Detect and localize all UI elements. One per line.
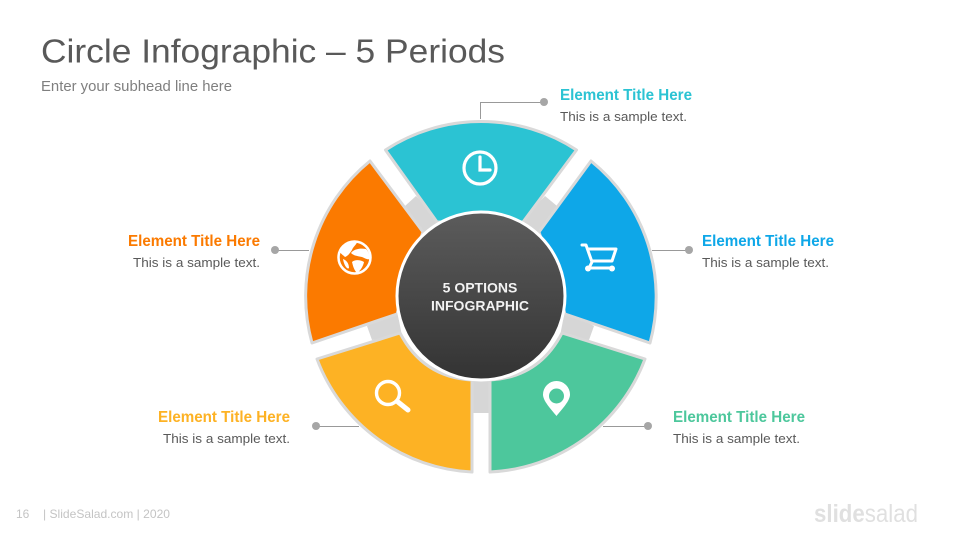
footer page number: 16 xyxy=(16,507,30,521)
callout: green: Element Title Here xyxy=(673,409,805,426)
icon: location pin xyxy=(543,381,570,416)
hub label: INFOGRAPHIC xyxy=(431,298,529,314)
center hub xyxy=(397,212,565,380)
subhead: Enter your subhead line here xyxy=(41,79,232,95)
callout: blue xyxy=(652,233,834,270)
callout: teal: This is a sample text. xyxy=(560,109,687,124)
segment: green xyxy=(490,333,645,472)
hub label: 5 OPTIONS xyxy=(443,280,517,296)
callout: teal xyxy=(480,87,692,124)
callout: blue: Element Title Here xyxy=(702,233,834,250)
title: Circle Infographic – 5 Periods xyxy=(41,34,505,70)
callout: orange: This is a sample text. xyxy=(133,255,260,270)
segment: orange xyxy=(306,161,423,343)
icon: magnifier xyxy=(376,382,408,410)
callout: blue: This is a sample text. xyxy=(702,255,829,270)
footer source: | SlideSalad.com | 2020 xyxy=(43,507,170,521)
segment: teal xyxy=(386,122,576,222)
callout: green: This is a sample text. xyxy=(673,431,800,446)
callout: green xyxy=(603,409,805,446)
icon: globe xyxy=(338,241,370,274)
callout: orange xyxy=(128,233,309,270)
callout: yellow: This is a sample text. xyxy=(163,431,290,446)
icon: clock xyxy=(464,152,496,184)
logo wordmark: slidesalad xyxy=(814,500,918,528)
callout: yellow: Element Title Here xyxy=(158,409,290,426)
callout: yellow xyxy=(158,409,359,446)
gray connector bands xyxy=(367,196,594,413)
segment: blue xyxy=(539,161,656,343)
callout: orange: Element Title Here xyxy=(128,233,260,250)
icon: cart xyxy=(582,245,616,272)
callout: teal: Element Title Here xyxy=(560,87,692,104)
segment: yellow xyxy=(317,333,472,472)
